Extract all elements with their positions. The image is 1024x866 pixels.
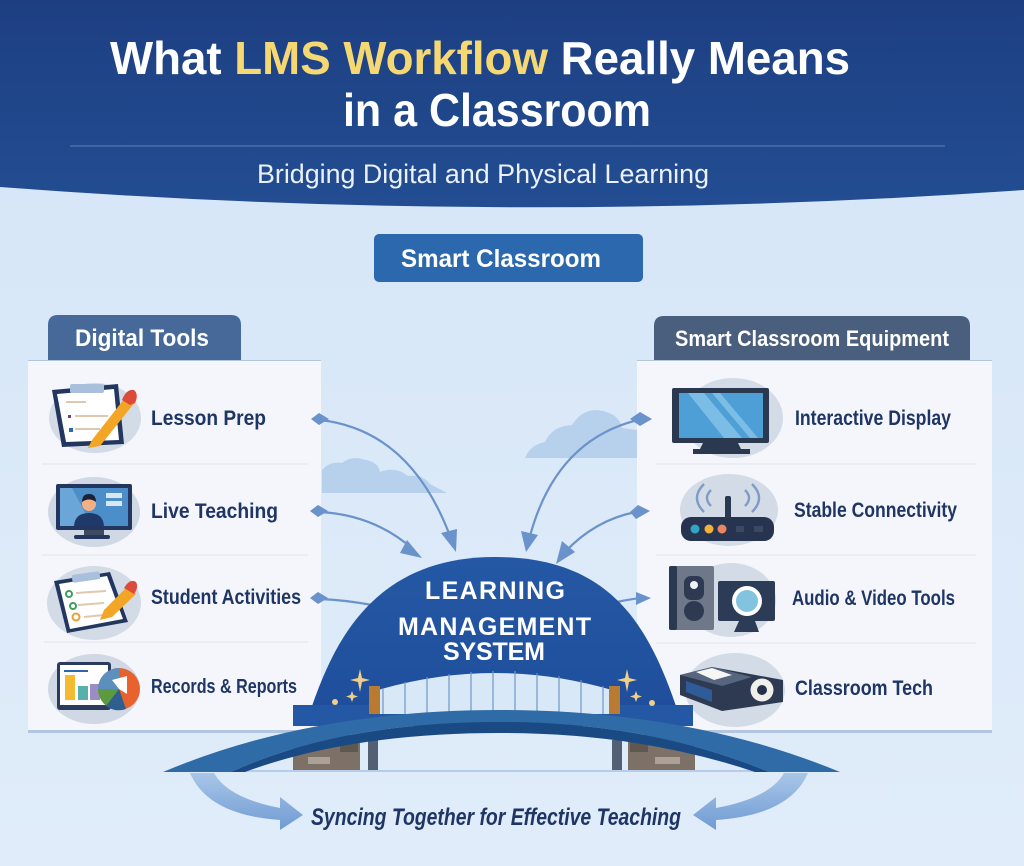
sync arrows [190,773,808,830]
sparkles [332,669,655,706]
row: Stable Connectivity [680,474,957,546]
row: Records & Reports [48,654,297,724]
subtitle: Bridging Digital and Physical Learning [257,159,709,189]
arch label [398,577,591,666]
arch label: LEARNING [425,577,565,605]
row: Student Activities: Student Activities [151,586,301,609]
row: Audio & Video Tools: Audio & Video Tools [792,587,955,610]
title: in a Classroom [343,84,651,136]
panel: Smart Classroom Equipment [637,316,992,733]
row: Live Teaching: Live Teaching [151,500,278,523]
row: Interactive Display: Interactive Display [795,407,951,430]
tab: Smart Classroom Equipment: Smart Classroom Equipment [675,326,950,351]
piers [293,735,695,772]
bridge: Learning Management System [163,557,840,772]
row: Student Activities [47,566,301,640]
deck [163,710,840,772]
connector arrows [310,412,652,605]
badge: Smart Classroom: Smart Classroom [401,245,601,273]
tab: Digital Tools [48,315,241,360]
row: Lesson Prep: Lesson Prep [151,407,266,430]
window with railing [378,673,612,714]
row: Lesson Prep [49,383,266,453]
arch [312,557,676,706]
tagline: Syncing Together for Effective Teaching [311,804,681,831]
clouds [322,410,637,493]
arch label: SYSTEM [443,638,545,666]
row: Classroom Tech [680,653,933,727]
tab: Smart Classroom Equipment [654,316,970,360]
row: Live Teaching [48,477,278,547]
row: Interactive Display [672,378,951,458]
title [110,32,850,136]
panel: Digital Tools [28,315,321,733]
title: What LMS Workflow Really Means [110,32,850,84]
header banner [0,0,1024,207]
arch label: MANAGEMENT [398,613,591,641]
row: Classroom Tech: Classroom Tech [795,677,933,700]
row: Records & Reports: Records & Reports [151,676,297,698]
row: Audio & Video Tools [669,563,955,637]
row: Stable Connectivity: Stable Connectivity [794,499,957,522]
tab: Digital Tools: Digital Tools [75,325,209,352]
badge: Smart Classroom [374,234,643,282]
